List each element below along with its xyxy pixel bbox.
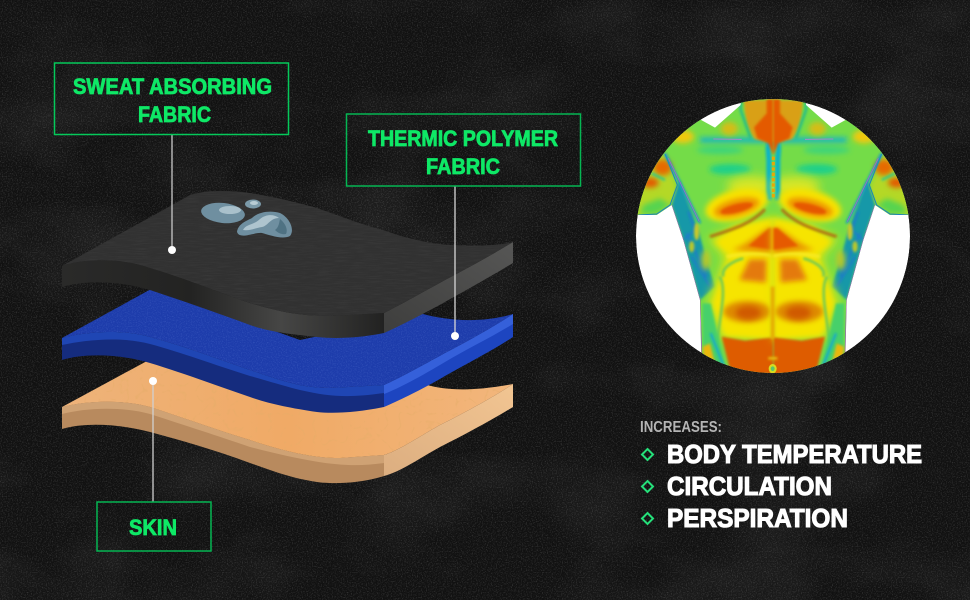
icon: diamond bullet: [642, 513, 653, 524]
item: circulation: CIRCULATION: [667, 471, 832, 501]
callout: sweat absorbing fabric: FABRIC: [138, 102, 211, 127]
abdomen midline: [769, 286, 776, 338]
callout: thermic polymer fabric: THERMIC POLYMER: [368, 126, 558, 151]
callout: skin: [97, 377, 211, 551]
blue top surface: [62, 288, 513, 388]
thermal torso: [638, 99, 908, 373]
item: body temperature: BODY TEMPERATURE: [667, 439, 922, 469]
layer: skin: [62, 361, 513, 483]
black right face: [384, 242, 513, 333]
blue right face: [384, 314, 513, 407]
sternum centre: [772, 156, 775, 198]
layer: thermic polymer fabric: [62, 288, 513, 413]
callout: thermic polymer fabric: FABRIC: [426, 154, 500, 179]
layer: sweat absorbing fabric: [62, 191, 513, 338]
callout: sweat absorbing fabric: [54, 63, 288, 254]
callout: skin: SKIN: [129, 515, 177, 540]
black top surface: [62, 191, 513, 316]
skin front face: [62, 402, 384, 483]
icon: diamond bullet: [642, 481, 653, 492]
item: perspiration: PERSPIRATION: [667, 503, 848, 533]
navel: [769, 364, 777, 373]
callout: thermic polymer fabric: [346, 114, 580, 340]
list: body effects: [642, 439, 922, 533]
water droplets: [200, 200, 292, 238]
skin top surface: [62, 361, 513, 458]
black front face: [62, 260, 384, 338]
heading: increases: INCREASES:: [640, 419, 722, 436]
blue front face: [62, 332, 384, 413]
callout: sweat absorbing fabric: SWEAT ABSORBING: [73, 74, 272, 99]
heat map body circle: [636, 99, 910, 373]
icon: diamond bullet: [642, 449, 653, 460]
skin right face: [384, 384, 513, 476]
